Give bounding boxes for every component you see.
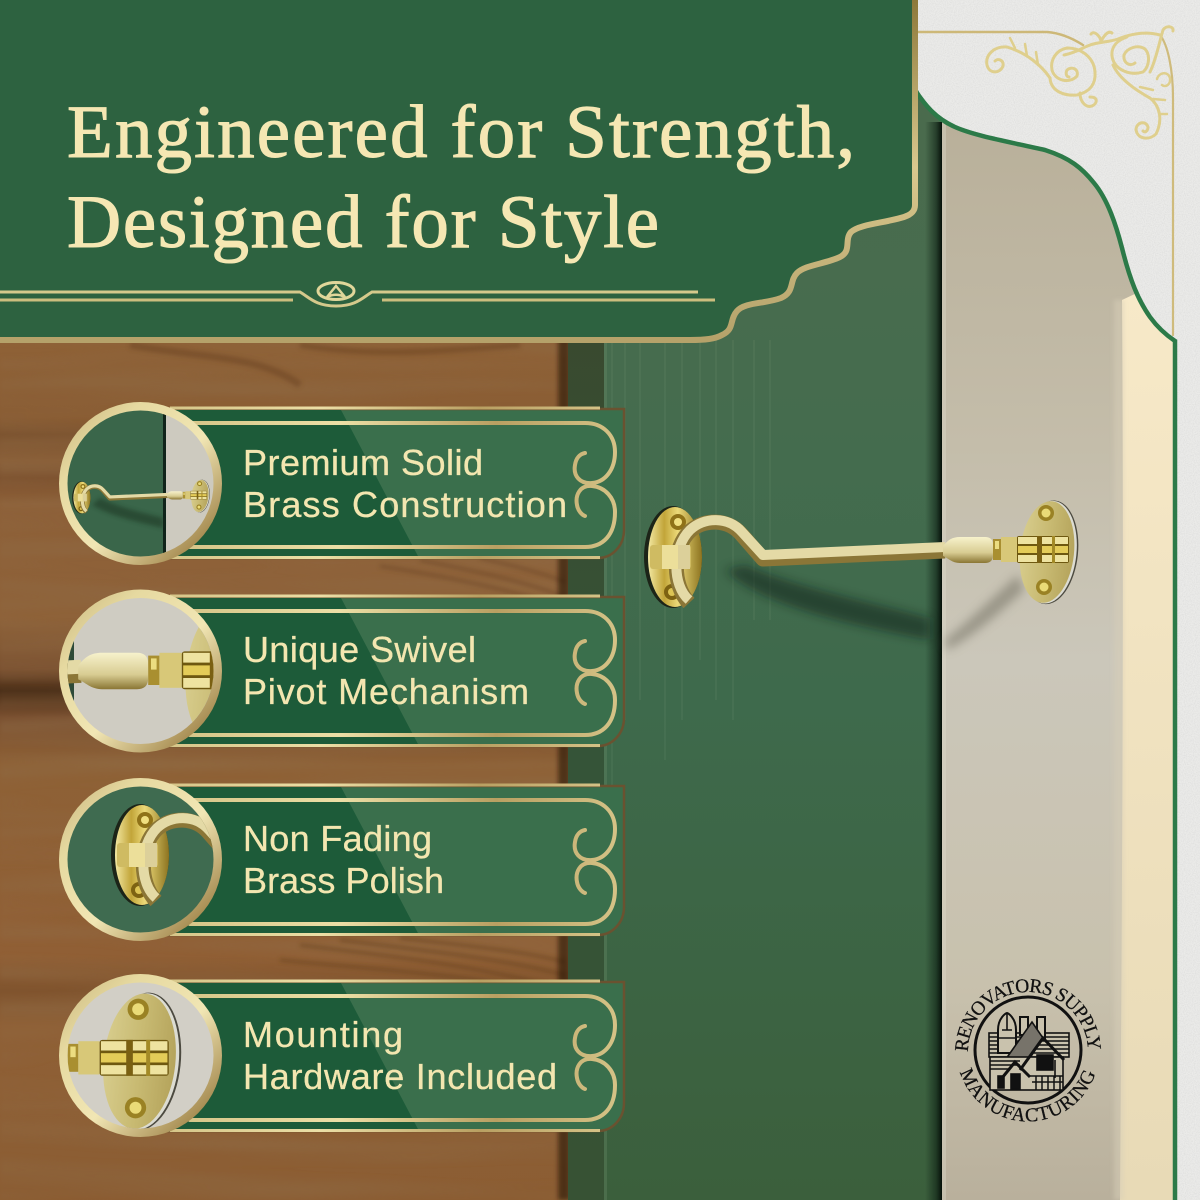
circle photo: mounting plate <box>59 974 222 1137</box>
panel: mounting hardware included <box>59 974 626 1137</box>
logo: renovators supply manufacturing: MANUFACTURING <box>960 1067 1094 1122</box>
panel base <box>168 784 624 936</box>
panel base <box>168 406 624 559</box>
feature text <box>243 629 529 712</box>
feature text <box>243 818 444 901</box>
title line one: Engineered for Strength, <box>67 91 855 174</box>
panel: unique swivel pivot mechanism <box>59 590 626 752</box>
panel: premium solid brass construction <box>59 400 624 570</box>
feature text: Premium Solid <box>243 442 483 483</box>
feature text <box>243 442 567 525</box>
feature text: Brass Construction <box>243 484 567 525</box>
corner ornament <box>918 27 1173 335</box>
door side shadow strip <box>568 338 606 1200</box>
panel: non fading brass polish <box>59 778 624 943</box>
panel base <box>168 594 624 747</box>
feature text <box>243 1014 557 1097</box>
circle photo: swivel pivot <box>59 590 222 752</box>
wood wall background <box>0 330 570 1200</box>
feature text: Non Fading <box>243 818 432 859</box>
green door panel <box>604 90 942 1200</box>
feature text: Mounting <box>243 1014 403 1055</box>
feature text: Pivot Mechanism <box>243 671 529 712</box>
divider with emblem <box>0 282 715 306</box>
circle photo: polished plate <box>59 778 222 941</box>
circle photo: whole hook <box>59 400 225 570</box>
banner shape <box>0 0 915 340</box>
feature text: Hardware Included <box>243 1056 557 1097</box>
feature text: Brass Polish <box>243 860 444 901</box>
door jamb and cream edge <box>942 122 1175 1200</box>
logo: renovators supply manufacturing: RENOVATORS SUPPLY <box>954 978 1102 1052</box>
icon: victorian house <box>989 1013 1069 1090</box>
logo: renovators supply manufacturing <box>954 978 1102 1122</box>
feature text: Unique Swivel <box>243 629 476 670</box>
panel base <box>168 980 624 1132</box>
title line two: Designed for Style <box>67 181 659 264</box>
green curved outline <box>915 90 1175 1200</box>
cast shadow of hook <box>725 565 1024 650</box>
icon: brass cabin hook <box>644 497 1083 608</box>
header banner <box>0 0 915 340</box>
